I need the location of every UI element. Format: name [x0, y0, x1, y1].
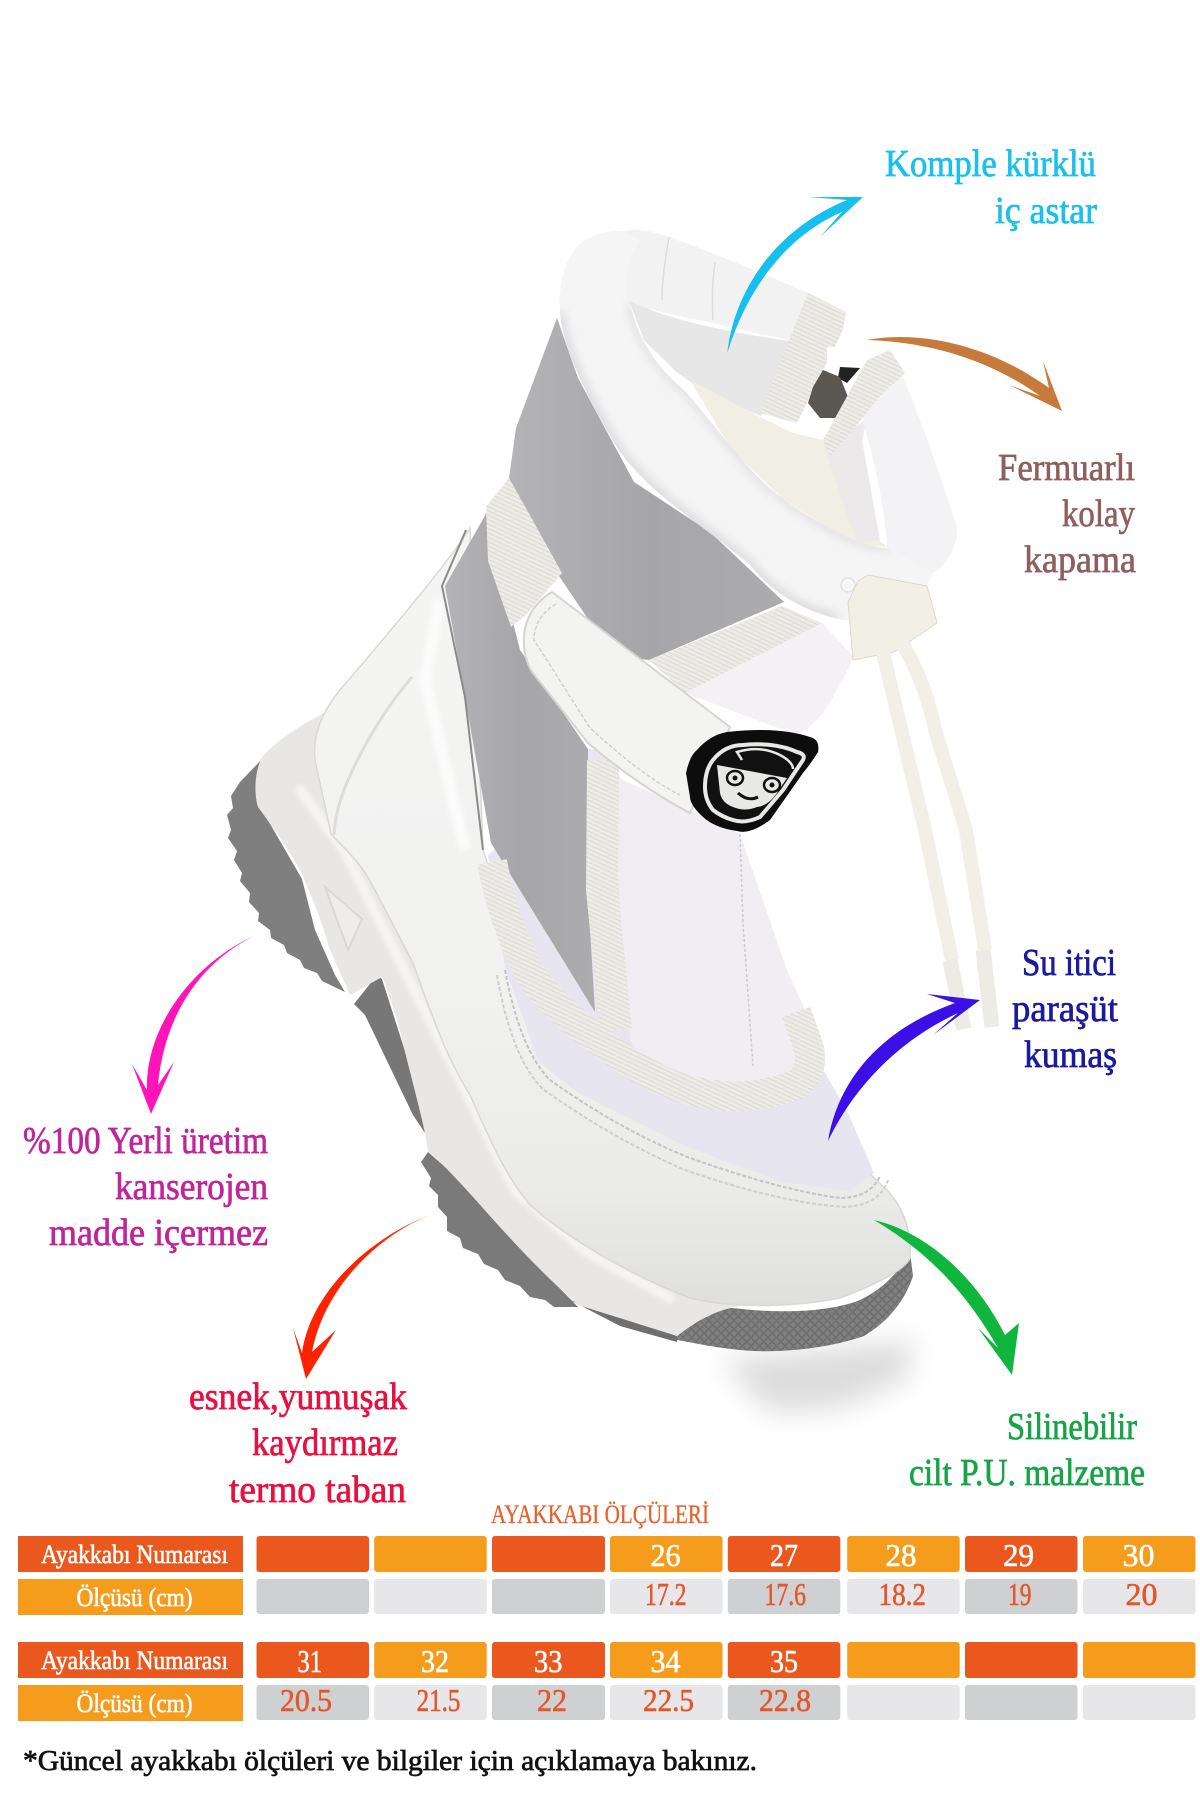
- row: sizes 26-30: [256, 1536, 1196, 1573]
- row: sizes 31-35: 32: [421, 1643, 449, 1679]
- callout: sole: termo taban: [229, 1469, 406, 1511]
- row: sizes 31-35: [256, 1642, 1196, 1679]
- callout: zipper: [998, 447, 1136, 581]
- row: measurements 26-30: 19: [1008, 1576, 1032, 1612]
- toggle: [841, 575, 937, 660]
- row: measurements 31-35: 22: [537, 1682, 567, 1718]
- arrow: blue: [828, 994, 980, 1141]
- callout: local production: madde içermez: [49, 1212, 268, 1254]
- arrow: cyan: [727, 197, 863, 353]
- callout: sole: kaydırmaz: [252, 1422, 398, 1464]
- front collar roll: [560, 231, 933, 621]
- table row labels: Ayakkabı Numarası: [41, 1540, 228, 1569]
- callout: inner lining: [885, 143, 1097, 232]
- back collar lining: [629, 301, 802, 416]
- laces: [880, 640, 992, 1029]
- shaft webbing: [486, 478, 562, 627]
- zipper pull: [808, 347, 860, 418]
- table row labels: Ölçüsü (cm): [76, 1689, 192, 1718]
- inner right panel: [823, 420, 880, 543]
- vertical tape: [602, 760, 616, 1030]
- callout: leather: [909, 1406, 1145, 1494]
- arrow: red: [293, 1215, 430, 1379]
- back collar: [623, 230, 808, 343]
- table row labels: Ölçüsü (cm): [76, 1583, 192, 1612]
- strap: [524, 592, 730, 813]
- gray panel edge line: [442, 530, 483, 850]
- back webbing: [760, 293, 846, 423]
- table row labels: Ayakkabı Numarası: [41, 1646, 228, 1675]
- leather upper: [314, 528, 910, 1306]
- lower collar puffer: [685, 623, 853, 735]
- row: measurements 26-30: [256, 1576, 1196, 1614]
- callout: fabric: Su itici: [1022, 942, 1116, 984]
- forefoot outsole: [421, 1152, 578, 1307]
- row: sizes 31-35: 34: [650, 1643, 680, 1679]
- row: measurements 31-35: 21.5: [416, 1682, 460, 1718]
- arrow: magenta: [132, 936, 254, 1114]
- vamp stitching: [505, 970, 880, 1198]
- callout: leather: Silinebilir: [1007, 1406, 1137, 1448]
- footnote: *Güncel ayakkabı ölçüleri ve bilgiler için açıklamaya bakınız.: [23, 1746, 757, 1777]
- vamp fabric: [488, 749, 874, 1191]
- front fabric panel: [610, 770, 822, 1102]
- leather seam: [334, 677, 412, 835]
- curved tape: [492, 862, 810, 1096]
- back collar creases: [662, 237, 715, 320]
- ground shadow: [720, 1340, 915, 1412]
- callout: local production: %100 Yerli üretim: [23, 1120, 268, 1162]
- second stitching: [497, 975, 888, 1207]
- callout: fabric: [1012, 942, 1118, 1076]
- row: measurements 26-30: 17.2: [645, 1576, 686, 1612]
- row: sizes 26-30: 26: [650, 1537, 680, 1573]
- lower gray panel: [445, 505, 595, 1012]
- heel outsole: [227, 756, 345, 992]
- size table: [18, 1536, 1196, 1721]
- row: measurements 31-35: 22.8: [759, 1682, 811, 1718]
- callout: local production: [23, 1120, 268, 1254]
- callout: zipper: Fermuarlı: [998, 447, 1135, 489]
- boot illustration: [227, 230, 992, 1351]
- row: measurements 31-35: 20.5: [280, 1682, 332, 1718]
- callout: sole: [189, 1376, 407, 1511]
- arrow: green: [874, 1220, 1019, 1375]
- row: measurements 31-35: [256, 1682, 1196, 1720]
- callout: zipper: kapama: [1024, 539, 1136, 581]
- leather sheen: [425, 600, 465, 850]
- row: measurements 26-30: 20: [1126, 1576, 1158, 1612]
- table row labels: [18, 1536, 243, 1721]
- mid outsole lug: [354, 975, 425, 1133]
- row: sizes 26-30: 30: [1122, 1537, 1154, 1573]
- row: sizes 26-30: 28: [886, 1537, 916, 1573]
- row: sizes 31-35: 35: [770, 1643, 798, 1679]
- ribbon below gray panel: [649, 606, 822, 693]
- callout: leather: cilt P.U. malzeme: [909, 1452, 1145, 1494]
- midsole: [255, 711, 760, 1336]
- center seam: [740, 834, 753, 1066]
- row: measurements 31-35: 22.5: [643, 1682, 694, 1718]
- fur lining: [690, 380, 887, 547]
- brand badge: [686, 730, 818, 832]
- callout: local production: kanserojen: [115, 1166, 268, 1208]
- upper gray panel: [509, 318, 784, 660]
- midsole emboss: [325, 887, 362, 950]
- table title: AYAKKABI ÖLÇÜLERİ: [491, 1500, 709, 1529]
- row: measurements 26-30: 18.2: [878, 1576, 926, 1612]
- arrow: brown: [867, 337, 1062, 411]
- sole edge: [570, 1300, 677, 1342]
- right webbing: [823, 350, 905, 457]
- midsole ridge: [300, 790, 670, 1298]
- row: sizes 31-35: 33: [534, 1643, 562, 1679]
- row: sizes 31-35: 31: [298, 1643, 322, 1679]
- row: sizes 26-30: 29: [1003, 1537, 1034, 1573]
- callout: fabric: kumaş: [1024, 1034, 1117, 1076]
- toe outsole: [677, 1252, 913, 1351]
- collar roll shading: [560, 304, 889, 619]
- callout: sole: esnek,yumuşak: [189, 1376, 407, 1418]
- callout: fabric: paraşüt: [1012, 988, 1118, 1030]
- right collar roll: [862, 377, 957, 573]
- row: measurements 26-30: 17.6: [764, 1576, 806, 1612]
- callout: inner lining: iç astar: [995, 190, 1097, 232]
- callout: zipper: kolay: [1062, 493, 1135, 535]
- row: sizes 26-30: 27: [770, 1537, 798, 1573]
- strap stitching: [534, 604, 680, 795]
- callout: inner lining: Komple kürklü: [885, 143, 1096, 185]
